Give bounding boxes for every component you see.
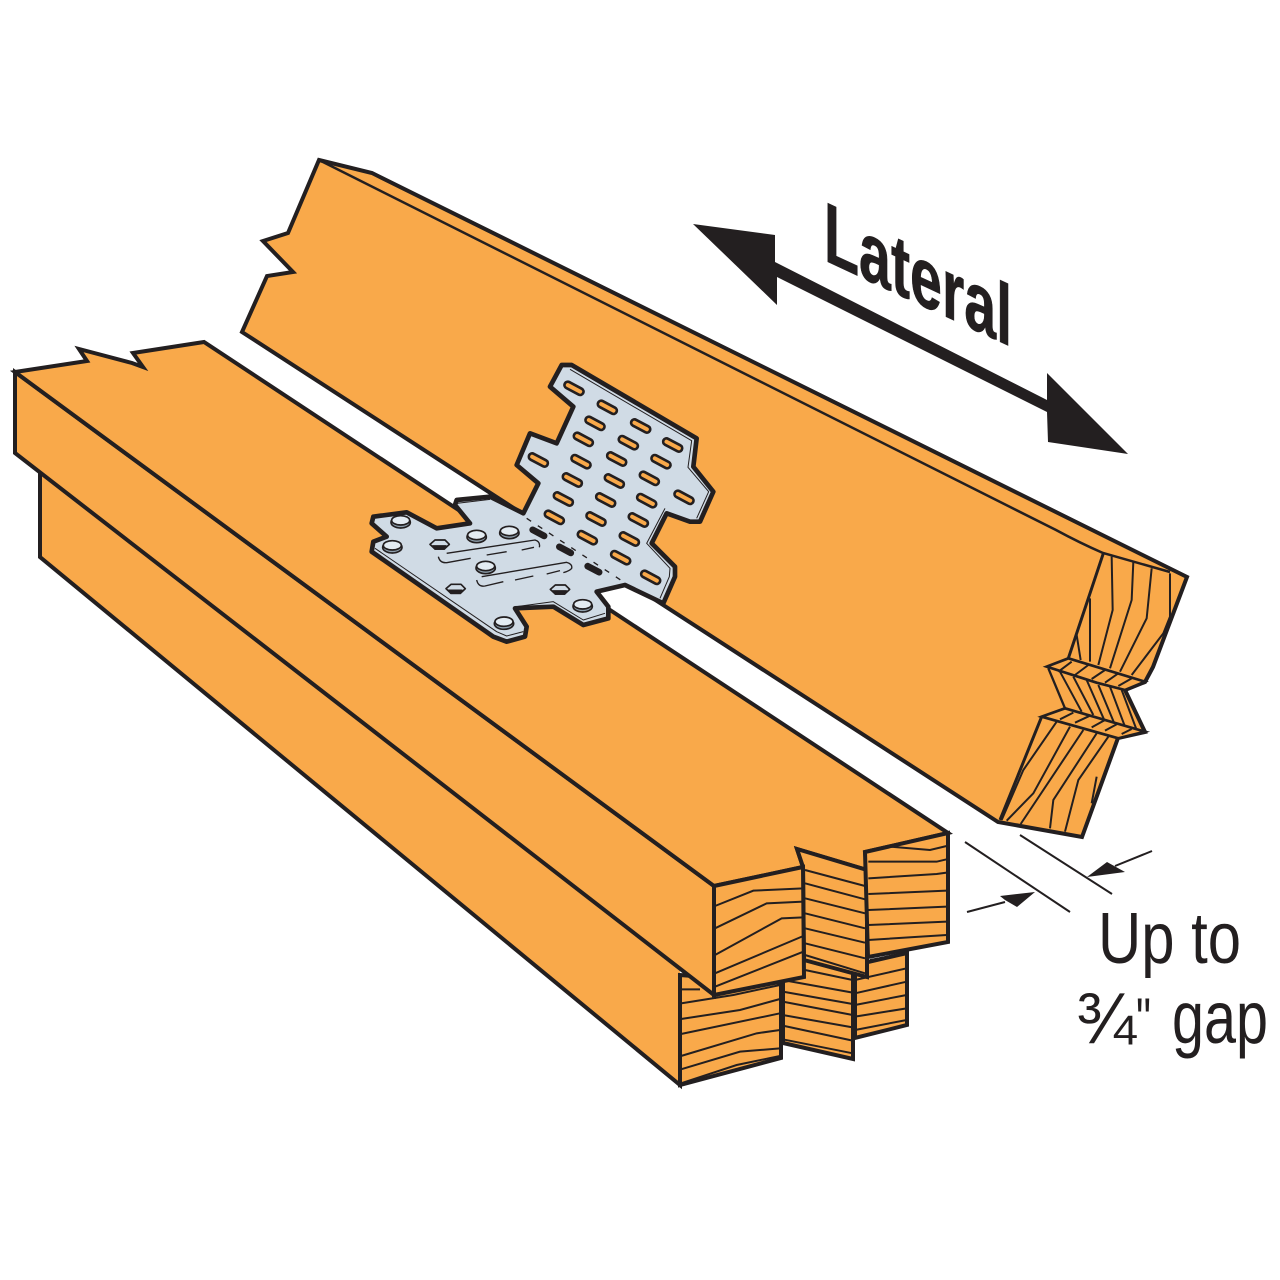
label: Lateral: Lateral <box>824 183 1012 365</box>
top member top face <box>15 342 948 886</box>
rivets <box>383 516 592 629</box>
bottom member side face <box>40 450 680 1085</box>
label: 3/4 inch gap <box>1076 976 1268 1059</box>
arrow: lateral double-headed <box>693 224 1128 454</box>
top member end pieces <box>714 833 948 995</box>
plate slots, orange side <box>528 381 695 585</box>
top member side face <box>15 372 714 995</box>
bottom member end pieces <box>680 953 907 1085</box>
plate edge thickness lines <box>375 369 709 636</box>
bottom member grain lines <box>681 953 907 1083</box>
fold line <box>527 518 622 581</box>
label: 3/4 inch gap: ¾ <box>1076 979 1137 1059</box>
gap extension lines <box>965 835 1112 912</box>
gap dimension marks <box>965 835 1152 912</box>
embossed ribs <box>438 540 572 586</box>
left gap arrow <box>967 892 1035 912</box>
upper beam body <box>242 160 1187 837</box>
metal gap plate <box>372 365 713 642</box>
lower lumber stack <box>15 342 948 1085</box>
top member grain lines <box>715 846 947 987</box>
hex holes <box>430 540 570 594</box>
right gap arrow <box>1087 851 1152 877</box>
label: 3/4 inch gap: " <box>1136 986 1151 1053</box>
plate slots along fold <box>529 526 603 576</box>
upper beam end grain <box>1000 553 1170 832</box>
upper beam top edge line <box>319 160 1170 572</box>
label: Up to: Up to <box>1098 899 1241 979</box>
plate outline <box>372 365 713 642</box>
upper lumber beam <box>242 160 1187 837</box>
